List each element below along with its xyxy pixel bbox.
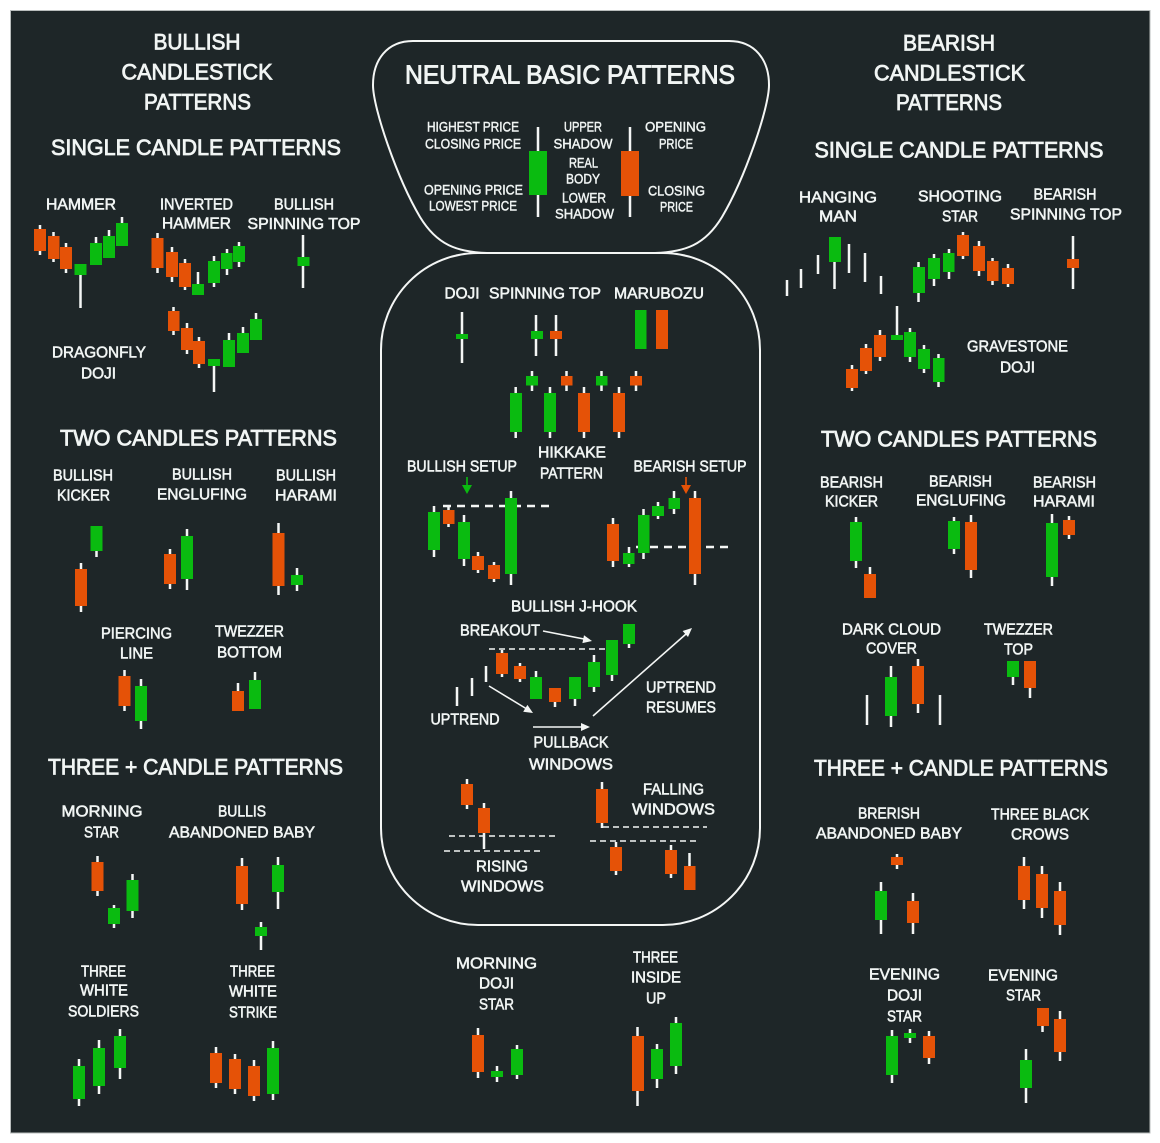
pattern: piercing line: PIERCING — [101, 625, 172, 642]
pattern: rising windows: WINDOWS — [461, 878, 544, 895]
pattern: hikkake: PATTERN — [540, 465, 603, 482]
pattern: dark cloud cover: COVER — [866, 640, 917, 657]
title: bullish candlestick patterns: BULLISH — [154, 29, 240, 54]
pattern: bullish j-hook: UPTREND — [646, 679, 716, 696]
pattern: three white strike: STRIKE — [229, 1004, 277, 1021]
pattern: three black crows: THREE BLACK — [991, 806, 1090, 823]
labels: bullish candle prices: HIGHEST PRICE — [427, 118, 519, 134]
labels: bullish candle prices — [424, 118, 523, 213]
pattern: three white soldiers: SOLDIERS — [68, 1003, 139, 1020]
pattern: three white strike: WHITE — [229, 983, 277, 1000]
pattern: shooting star — [913, 188, 1014, 302]
pattern: gravestone doji — [846, 306, 1068, 391]
pattern: evening doji star: STAR — [887, 1008, 922, 1025]
pattern: dragonfly doji: DRAGONFLY — [52, 344, 146, 361]
pattern: bearish engulfing: BEARISH — [929, 473, 992, 490]
pattern: bearish abandoned baby: ABANDONED BABY — [816, 825, 962, 842]
pattern: bearish engulfing: ENGLUFING — [916, 492, 1006, 509]
title: bullish candlestick patterns — [122, 29, 273, 114]
pattern: tweezer top: TOP — [1004, 641, 1033, 658]
pattern: doji: DOJI — [444, 285, 480, 302]
pattern: morning doji star: STAR — [479, 996, 514, 1013]
labels: candle anatomy — [554, 118, 615, 221]
pattern: bullish engulfing: BULLISH — [172, 466, 232, 483]
candle: anatomy bearish — [621, 127, 639, 217]
pattern: gravestone doji: DOJI — [1000, 359, 1035, 376]
labels: candle anatomy: REAL — [569, 154, 598, 170]
pattern: hanging man: MAN — [819, 208, 857, 225]
pattern: falling windows — [590, 781, 715, 890]
pattern: bearish harami: BEARISH — [1033, 474, 1096, 491]
pattern: bearish spinning top: BEARISH — [1034, 186, 1096, 203]
pattern: bullish j-hook: PULLBACK — [534, 734, 609, 751]
pattern: bearish engulfing — [916, 473, 1006, 578]
pattern: bullish kicker — [53, 467, 113, 612]
pattern: hanging man: HANGING — [799, 189, 877, 206]
pattern: spinning top: SPINNING TOP — [489, 285, 601, 302]
labels: bullish candle prices: LOWEST PRICE — [429, 197, 517, 213]
pattern: bearish setup — [607, 458, 746, 585]
pattern: three white soldiers: THREE — [81, 963, 126, 980]
pattern: hammer — [34, 196, 128, 308]
pattern: evening doji star: EVENING — [869, 966, 940, 983]
pattern: three inside up: THREE — [633, 949, 678, 966]
column: bullish patterns — [34, 29, 360, 1106]
arrow: pullback across — [533, 723, 590, 731]
pattern: tweezer bottom: BOTTOM — [217, 644, 282, 661]
pattern: bullish engulfing: ENGLUFING — [157, 486, 247, 503]
pattern: morning doji star: DOJI — [479, 975, 514, 992]
labels: bearish candle prices: CLOSING — [648, 182, 705, 198]
pattern: dragonfly doji — [52, 307, 262, 392]
panel: central patterns — [381, 253, 760, 925]
pattern: bearish kicker — [820, 474, 883, 598]
pattern: morning doji star: MORNING — [456, 955, 537, 972]
pattern: tweezer bottom: TWEZZER — [215, 623, 284, 640]
pattern: hammer: HAMMER — [46, 196, 116, 213]
pattern: bullish harami — [272, 467, 337, 595]
pattern: bullish j-hook: RESUMES — [646, 699, 716, 716]
pattern: dragonfly doji: DOJI — [81, 365, 116, 382]
arrow: uptrend resumes — [593, 628, 692, 716]
pattern: evening star — [988, 967, 1066, 1103]
pattern: tweezer top: TWEZZER — [984, 621, 1053, 638]
labels: candle anatomy: SHADOW — [555, 205, 615, 221]
pattern: evening star: EVENING — [988, 967, 1058, 984]
pattern: bullish harami: BULLISH — [276, 467, 336, 484]
pattern: bearish kicker: BEARISH — [820, 474, 883, 491]
pattern: inverted hammer: HAMMER — [162, 215, 231, 232]
pattern: evening doji star: DOJI — [887, 987, 922, 1004]
pattern: bearish harami: HARAMI — [1033, 493, 1095, 510]
pattern: three black crows — [991, 806, 1090, 935]
pattern: dark cloud cover: DARK CLOUD — [842, 621, 941, 638]
pattern: three inside up: UP — [646, 990, 666, 1007]
pattern: shooting star: STAR — [942, 208, 978, 225]
panel: neutral basic patterns — [373, 41, 769, 253]
pattern: dark cloud cover — [842, 621, 941, 727]
pattern: bullish j-hook: BREAKOUT — [460, 622, 540, 639]
pattern: hikkake — [510, 371, 642, 482]
labels: candle anatomy: UPPER — [564, 118, 602, 134]
pattern: tweezer bottom — [215, 623, 284, 711]
pattern: morning doji star — [456, 955, 537, 1082]
arrow: pullback down — [489, 686, 533, 713]
pattern: falling windows: WINDOWS — [632, 801, 715, 818]
heading: two candles patterns: TWO CANDLES PATTERNS — [821, 426, 1097, 451]
pattern: three white soldiers: WHITE — [80, 982, 128, 999]
pattern: morning star: MORNING — [62, 803, 142, 820]
labels: bearish candle prices: PRICE — [659, 135, 693, 151]
labels: candle anatomy: LOWER — [562, 189, 606, 205]
labels: candle anatomy: SHADOW — [554, 135, 613, 151]
title: bearish candlestick patterns: PATTERNS — [896, 90, 1002, 115]
pattern: piercing line: LINE — [120, 645, 153, 662]
pattern: three black crows: CROWS — [1011, 826, 1069, 843]
pattern: three white soldiers — [68, 963, 139, 1106]
pattern: bullish spinning top — [248, 196, 360, 288]
pattern: bullish abandoned baby: ABANDONED BABY — [169, 824, 315, 841]
pattern: falling windows: FALLING — [643, 781, 704, 798]
pattern: evening doji star — [869, 966, 940, 1083]
pattern: bullish harami: HARAMI — [275, 487, 337, 504]
pattern: rising windows: RISING — [476, 858, 528, 875]
pattern: bearish kicker: KICKER — [825, 493, 878, 510]
labels: bearish candle prices — [645, 118, 706, 214]
pattern: three white strike — [210, 963, 279, 1101]
pattern: three inside up: INSIDE — [631, 969, 681, 986]
pattern: piercing line — [101, 625, 172, 729]
pattern: bullish abandoned baby: BULLIS — [218, 803, 266, 820]
candle: anatomy bullish — [529, 127, 547, 217]
title: bearish candlestick patterns — [874, 30, 1025, 115]
pattern: bearish setup: BEARISH SETUP — [634, 458, 746, 475]
title: bearish candlestick patterns: BEARISH — [903, 30, 995, 55]
pattern: rising windows — [444, 779, 559, 895]
title: bullish candlestick patterns: PATTERNS — [144, 89, 251, 114]
pattern: three inside up — [631, 949, 682, 1106]
pattern: shooting star: SHOOTING — [918, 188, 1002, 205]
pattern: bullish j-hook: BULLISH J-HOOK — [511, 598, 638, 615]
title: bullish candlestick patterns: CANDLESTICK — [122, 59, 273, 84]
pattern: three white strike: THREE — [230, 963, 275, 980]
pattern: bearish spinning top — [1010, 186, 1122, 289]
heading: three plus candle patterns: THREE + CANDLE PATTERNS — [48, 754, 343, 779]
heading: single candle patterns: SINGLE CANDLE PATTERNS — [814, 137, 1104, 162]
heading: three plus candle patterns: THREE + CANDLE PATTERNS — [814, 755, 1108, 780]
pattern: doji — [444, 285, 480, 363]
heading: two candles patterns: TWO CANDLES PATTERNS — [60, 425, 337, 450]
pattern: bearish abandoned baby: BRERISH — [858, 805, 920, 822]
arrow: breakout — [543, 631, 592, 643]
pattern: bearish abandoned baby — [816, 805, 962, 934]
heading: single candle patterns: SINGLE CANDLE PATTERNS — [51, 135, 341, 160]
pattern: bearish spinning top: SPINNING TOP — [1010, 206, 1122, 223]
labels: bearish candle prices: OPENING — [645, 118, 706, 134]
heading: neutral basic patterns: NEUTRAL BASIC PATTERNS — [405, 59, 735, 89]
pattern: bullish j-hook: WINDOWS — [529, 756, 613, 773]
pattern: bearish harami — [1033, 474, 1096, 586]
pattern: bullish abandoned baby — [169, 803, 315, 950]
pattern: bullish kicker: BULLISH — [53, 467, 113, 484]
pattern: marubozu — [614, 285, 704, 349]
labels: bullish candle prices: OPENING PRICE — [424, 181, 523, 197]
column: bearish patterns — [787, 30, 1122, 1103]
pattern: inverted hammer — [152, 196, 245, 295]
pattern: marubozu: MARUBOZU — [614, 285, 704, 302]
pattern: bullish engulfing — [157, 466, 247, 590]
pattern: bullish spinning top: SPINNING TOP — [248, 216, 360, 233]
labels: candle anatomy: BODY — [566, 170, 601, 186]
pattern: inverted hammer: INVERTED — [160, 196, 233, 213]
pattern: hikkake: HIKKAKE — [538, 444, 606, 461]
pattern: bullish j-hook — [430, 598, 716, 773]
labels: bullish candle prices: CLOSING PRICE — [425, 135, 521, 151]
pattern: evening star: STAR — [1006, 987, 1041, 1004]
pattern: morning star: STAR — [84, 824, 119, 841]
pattern: gravestone doji: GRAVESTONE — [967, 338, 1068, 355]
title: bearish candlestick patterns: CANDLESTICK — [874, 60, 1025, 85]
pattern: tweezer top — [984, 621, 1053, 698]
pattern: spinning top — [489, 285, 601, 356]
pattern: hanging man — [787, 189, 881, 296]
pattern: bullish kicker: KICKER — [57, 487, 110, 504]
labels: bearish candle prices: PRICE — [660, 198, 693, 214]
pattern: bullish spinning top: BULLISH — [274, 196, 334, 213]
pattern: bullish j-hook: UPTREND — [430, 711, 500, 728]
pattern: bullish setup — [407, 458, 552, 585]
pattern: bullish setup: BULLISH SETUP — [407, 458, 517, 475]
pattern: morning star — [62, 803, 142, 928]
